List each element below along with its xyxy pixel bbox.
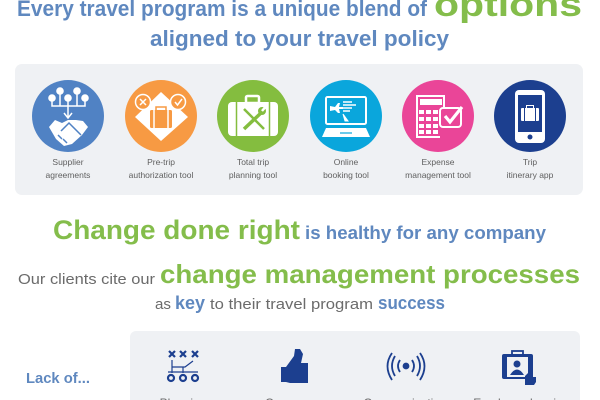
title <box>17 0 582 51</box>
icon: trip itinerary app <box>494 80 566 152</box>
panel: lack of <box>130 331 580 400</box>
icon: planning <box>168 351 198 381</box>
label: trip line 2: itinerary app <box>507 170 554 180</box>
text: change management processes: Our clients cite our <box>18 271 155 288</box>
icon: expense management tool <box>402 80 474 152</box>
panel: travel program options <box>15 64 583 195</box>
text: key to success <box>155 293 445 313</box>
text: change management processes: change management processes <box>160 259 580 289</box>
label: expense line 2: management tool <box>405 170 471 180</box>
label: total trip: Total trip <box>237 157 269 167</box>
label: supplier agreements line 2: agreements <box>46 170 90 180</box>
icon: communication <box>388 353 424 380</box>
label: online: Online <box>334 157 359 167</box>
label: expense: Expense <box>421 157 455 167</box>
text: key to success: success <box>378 293 445 313</box>
label: pre-trip tool: Pre-trip <box>147 157 175 167</box>
icon: supplier agreements <box>32 80 104 152</box>
heading: change done right <box>53 215 546 245</box>
heading: change done right: is healthy for any company <box>305 223 546 243</box>
label: trip: Trip <box>523 157 537 167</box>
heading: change done right: Change done right <box>53 215 300 245</box>
text: key to success: to their travel program <box>210 296 373 313</box>
icon: thumbs up <box>281 349 308 383</box>
icon: pre-trip authorization tool <box>125 80 197 152</box>
icon: employee buy-in <box>502 351 536 385</box>
label: pre-trip tool line 2: authorization tool <box>129 170 193 180</box>
label: lack of: Lack of... <box>26 370 90 387</box>
icon: total trip planning tool <box>217 80 289 152</box>
icon: online booking tool <box>310 80 382 152</box>
label: total trip line 2: planning tool <box>229 170 277 180</box>
title: aligned to your travel policy <box>150 26 450 51</box>
label: supplier agreements: Supplier <box>52 157 84 167</box>
label: online line 2: booking tool <box>323 170 369 180</box>
text: key to success: key <box>175 293 205 313</box>
text: key to success: as <box>155 296 171 313</box>
